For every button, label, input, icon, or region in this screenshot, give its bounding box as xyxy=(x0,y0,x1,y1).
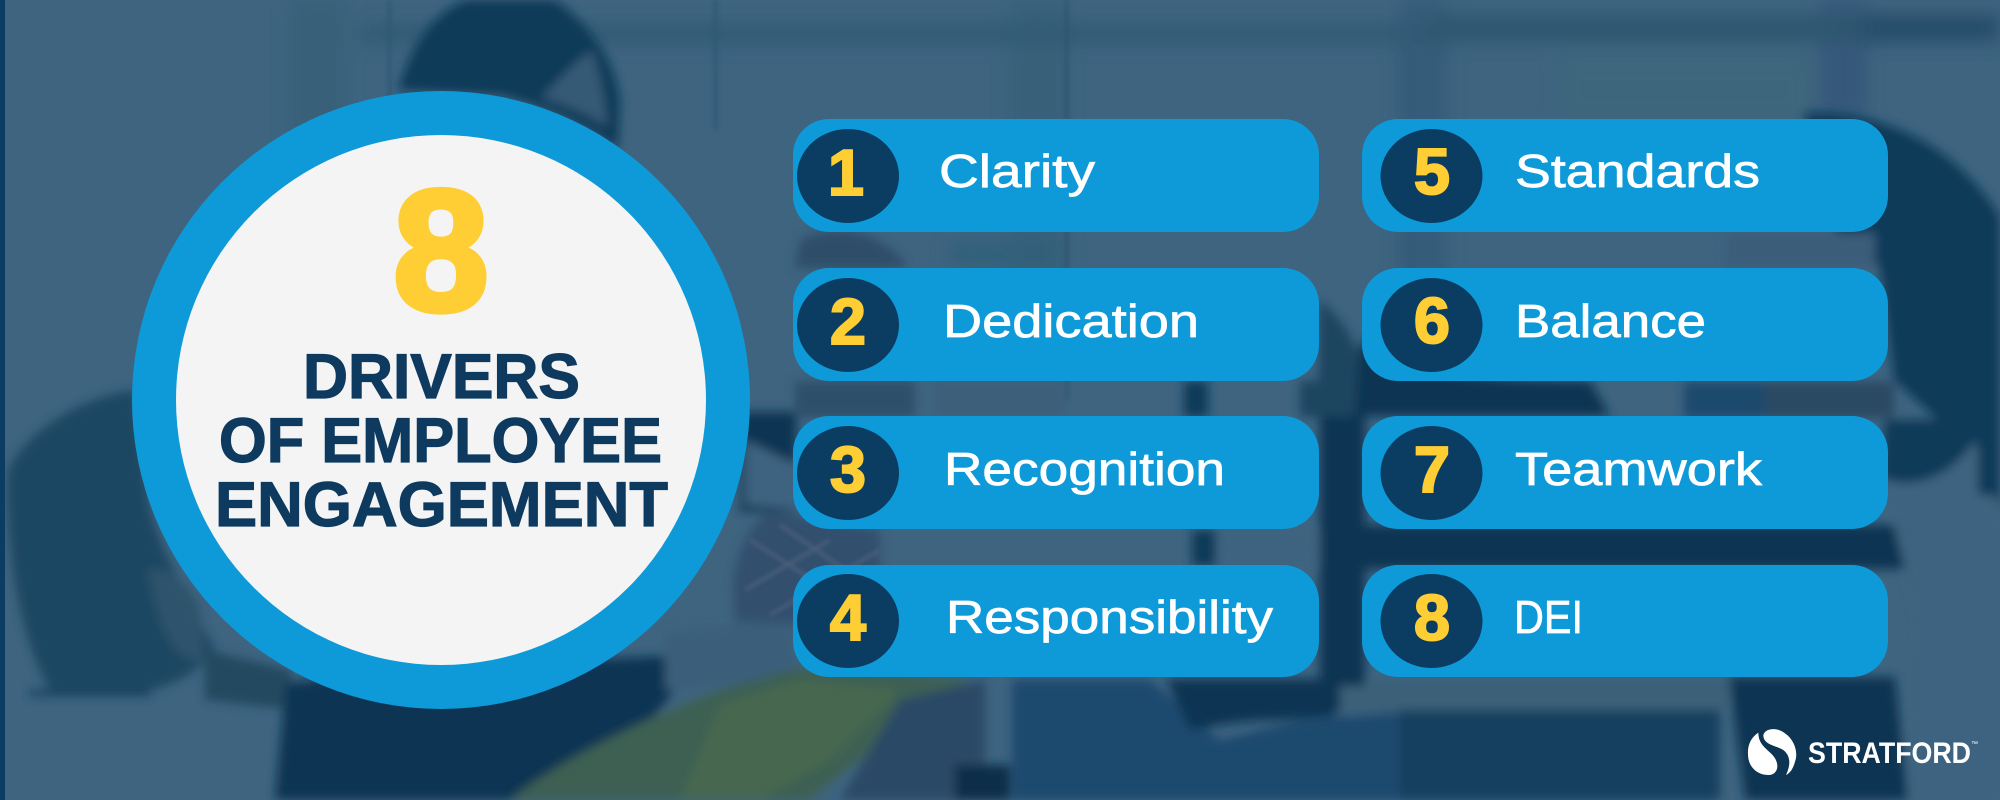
driver 5: Standards: 5 xyxy=(1414,135,1450,208)
center plaid and cup xyxy=(840,680,985,800)
left edge strip xyxy=(0,0,5,800)
bottom center dark hair xyxy=(275,655,690,800)
driver 5: Standards xyxy=(1362,119,1888,232)
driver 1: Clarity xyxy=(793,119,1319,232)
driver 6: Balance xyxy=(1362,268,1888,381)
driver 1: Clarity: 1 xyxy=(828,136,864,209)
Stratford logo: STRATFORD xyxy=(1808,737,1971,770)
heading: ENGAGEMENT xyxy=(215,470,668,540)
center faces between pills xyxy=(795,231,905,268)
driver 8: DEI: 8 xyxy=(1414,581,1450,654)
central circle badge xyxy=(132,91,750,709)
driver 3: Recognition: 3 xyxy=(830,433,866,506)
Stratford logo xyxy=(1748,729,1978,775)
right person hair xyxy=(1804,113,2000,450)
yellow sleeve xyxy=(510,668,970,800)
driver 5: Standards: Standards xyxy=(1515,145,1760,197)
Stratford logo: ™ xyxy=(1971,741,1978,748)
driver 1: Clarity: Clarity xyxy=(939,145,1095,197)
middle right hair xyxy=(1355,340,1610,416)
woman top hair xyxy=(398,0,620,150)
right-of-circle dark band and arm xyxy=(740,412,796,512)
driver 8: DEI xyxy=(1362,565,1888,677)
navy sleeve xyxy=(1012,680,1420,800)
driver 4: Responsibility xyxy=(793,565,1319,677)
driver 6: Balance: Balance xyxy=(1515,295,1706,347)
driver 6: Balance: 6 xyxy=(1414,284,1450,357)
right person shirt xyxy=(1882,440,2000,800)
driver 7: Teamwork: Teamwork xyxy=(1515,443,1763,495)
heading: DRIVERS xyxy=(303,342,580,412)
icon: S droplet mark xyxy=(1748,729,1796,775)
driver 2: Dedication xyxy=(793,268,1319,381)
driver 2: Dedication: 2 xyxy=(830,285,866,358)
driver 4: Responsibility: 4 xyxy=(830,581,866,654)
driver 3: Recognition xyxy=(793,416,1319,529)
left person hair and shoulders xyxy=(8,390,215,695)
driver 2: Dedication: Dedication xyxy=(943,295,1199,347)
gap between pills 7 and 8 xyxy=(1360,525,1912,569)
big number 8: 8 xyxy=(393,155,489,347)
driver 3: Recognition: Recognition xyxy=(944,443,1225,495)
driver 7: Teamwork: 7 xyxy=(1414,433,1450,506)
plaid shirt xyxy=(733,512,880,625)
heading: OF EMPLOYEE xyxy=(219,406,662,476)
driver 7: Teamwork xyxy=(1362,416,1888,529)
heading xyxy=(215,342,668,540)
driver 4: Responsibility: Responsibility xyxy=(946,591,1273,643)
driver 8: DEI: DEI xyxy=(1514,591,1583,643)
